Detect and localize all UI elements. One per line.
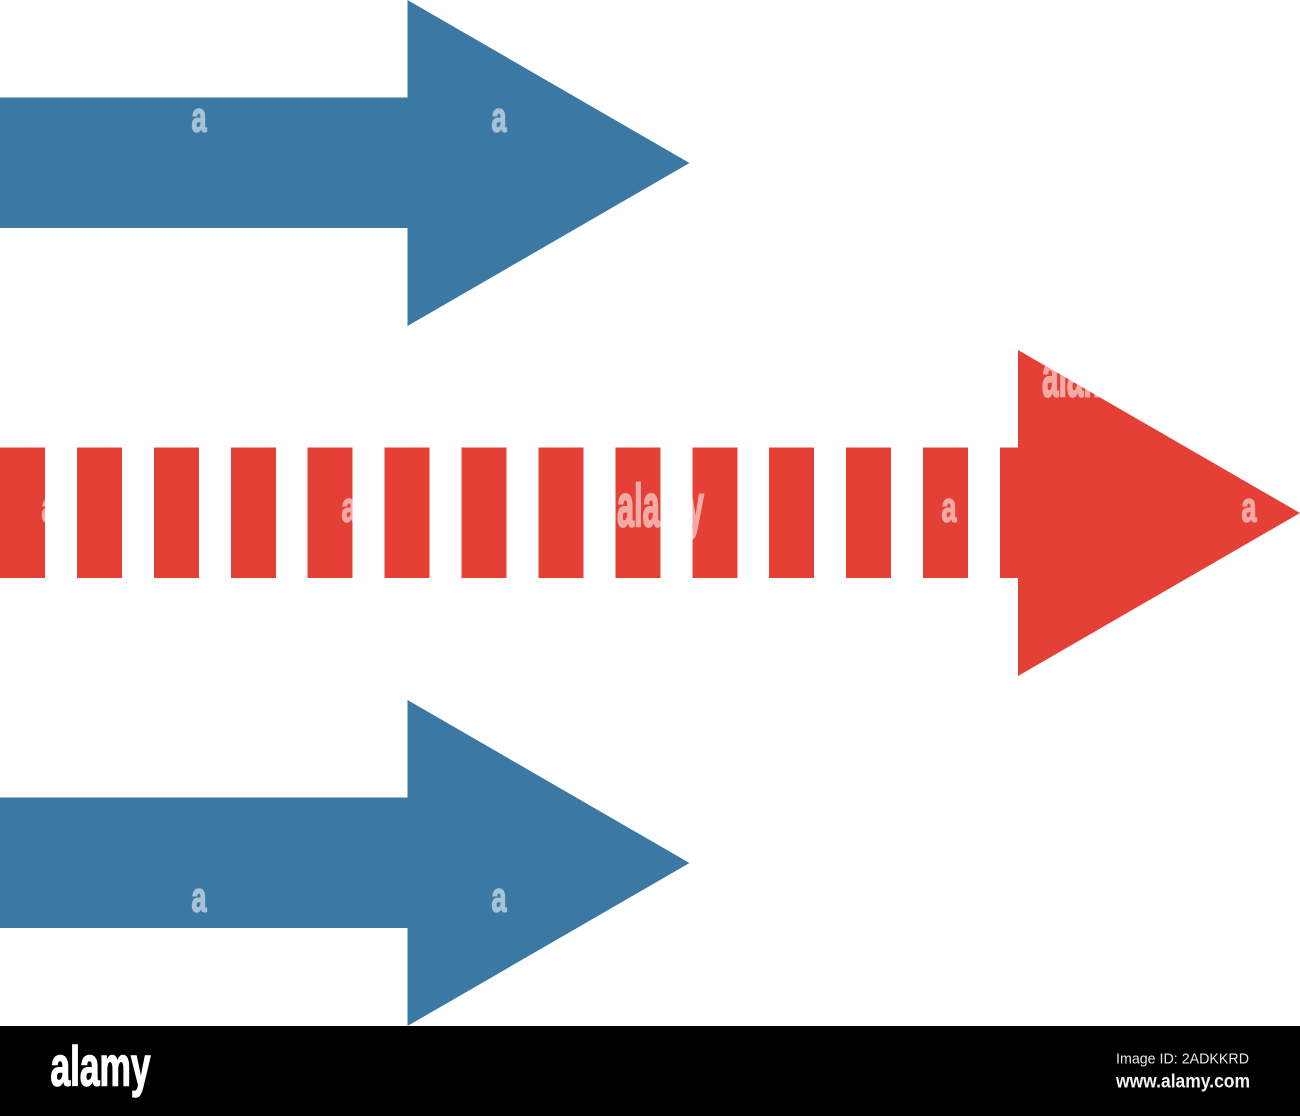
middle red dashed arrow: a — [342, 484, 357, 530]
image id: Image ID: 2ADKKRD — [1116, 1052, 1249, 1068]
bottom blue arrow: a — [492, 874, 507, 920]
footer bar — [0, 1026, 1300, 1116]
alamy logo: alamy — [50, 1034, 150, 1098]
middle red dashed arrow: a — [42, 484, 57, 530]
middle red dashed arrow: a — [1242, 484, 1257, 530]
middle red dashed arrow: alamy — [617, 472, 704, 540]
bottom blue arrow: a — [192, 874, 207, 920]
top blue arrow — [0, 0, 690, 326]
middle red dashed arrow: a — [942, 484, 957, 530]
top blue arrow: a — [492, 94, 507, 140]
website: www.alamy.com — [1115, 1072, 1250, 1092]
middle red dashed arrow — [0, 342, 1300, 676]
top blue arrow: a — [192, 94, 207, 140]
middle red dashed arrow: alam — [1042, 342, 1110, 410]
bottom blue arrow — [0, 700, 690, 1026]
